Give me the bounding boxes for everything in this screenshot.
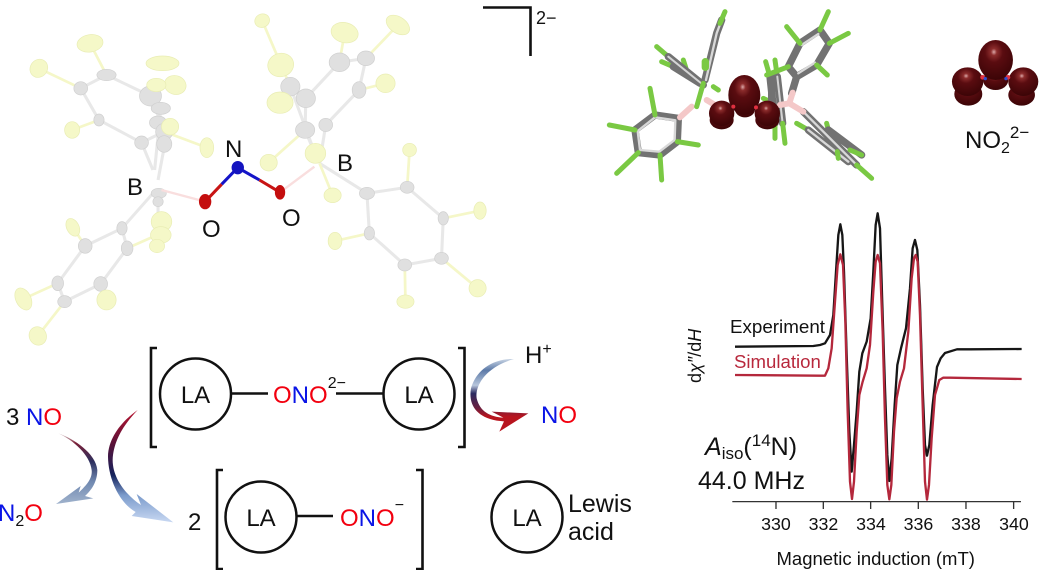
complex with two Lewis acids: LA <box>181 382 210 409</box>
product NO: NO <box>541 402 577 429</box>
reagent 3 NO: 3 NO <box>6 404 62 431</box>
EPR chart: Simulation <box>734 351 821 372</box>
2 x mono Lewis acid adduct: 2 <box>188 509 201 536</box>
EPR chart: 340 <box>999 514 1029 534</box>
DFT spin density model <box>609 12 872 180</box>
EPR chart: 336 <box>904 514 933 534</box>
EPR chart <box>685 213 1029 569</box>
EPR chart: 332 <box>809 514 838 534</box>
EPR chart: 338 <box>951 514 981 534</box>
legend: Lewis acid: LA <box>512 505 542 532</box>
legend: Lewis acid: acid <box>568 518 614 546</box>
product N2O: O <box>24 500 43 527</box>
orbital lobes in complex <box>709 75 780 129</box>
NO2 2- label: 2− <box>1010 123 1029 142</box>
complex with two Lewis acids: LA <box>404 382 434 409</box>
EPR chart: 44.0 MHz <box>698 467 805 495</box>
crystal structure <box>11 11 486 348</box>
crystal structure: O <box>282 205 301 232</box>
EPR chart: 14 <box>752 431 771 450</box>
H+: + <box>542 341 552 358</box>
EPR chart: Experiment <box>730 316 826 337</box>
2 x mono Lewis acid adduct <box>188 470 422 569</box>
2 x mono Lewis acid adduct: LA <box>246 505 276 532</box>
EPR chart: 330 <box>761 514 791 534</box>
legend: Lewis acid <box>492 482 632 552</box>
charge bracket 2-: 2− <box>536 8 557 28</box>
EPR chart: iso <box>722 444 743 463</box>
complex with two Lewis acids: 2− <box>328 375 346 392</box>
crystal structure: N <box>225 136 242 163</box>
isolated NO2 2- spin density <box>952 40 1038 106</box>
2 x mono Lewis acid adduct: − <box>395 497 404 514</box>
crystal structure: B <box>337 150 353 177</box>
EPR chart: A <box>703 433 722 461</box>
arrow: H+ to NO <box>470 359 528 432</box>
EPR chart: ( <box>743 433 752 461</box>
EPR chart: Magnetic induction (mT) <box>776 548 975 569</box>
arrow: to monoadduct <box>108 410 173 522</box>
legend: Lewis acid: Lewis <box>568 490 632 518</box>
H+: H <box>525 342 542 369</box>
NO2 2- label: NO <box>965 127 1001 154</box>
EPR chart: dχ″/dH <box>685 328 705 383</box>
complex with two Lewis acids <box>151 348 464 447</box>
EPR chart: 334 <box>856 514 886 534</box>
2 x mono Lewis acid adduct: ONO <box>340 505 395 532</box>
crystal structure: B <box>127 174 143 201</box>
arrow: NO to N2O <box>56 433 97 504</box>
EPR chart: N) <box>771 433 797 461</box>
complex with two Lewis acids: ONO <box>273 382 328 409</box>
charge bracket 2- <box>483 8 557 56</box>
crystal structure: O <box>202 216 221 243</box>
product N2O: 2 <box>15 513 24 530</box>
NO2 2- label: 2 <box>1001 140 1010 157</box>
